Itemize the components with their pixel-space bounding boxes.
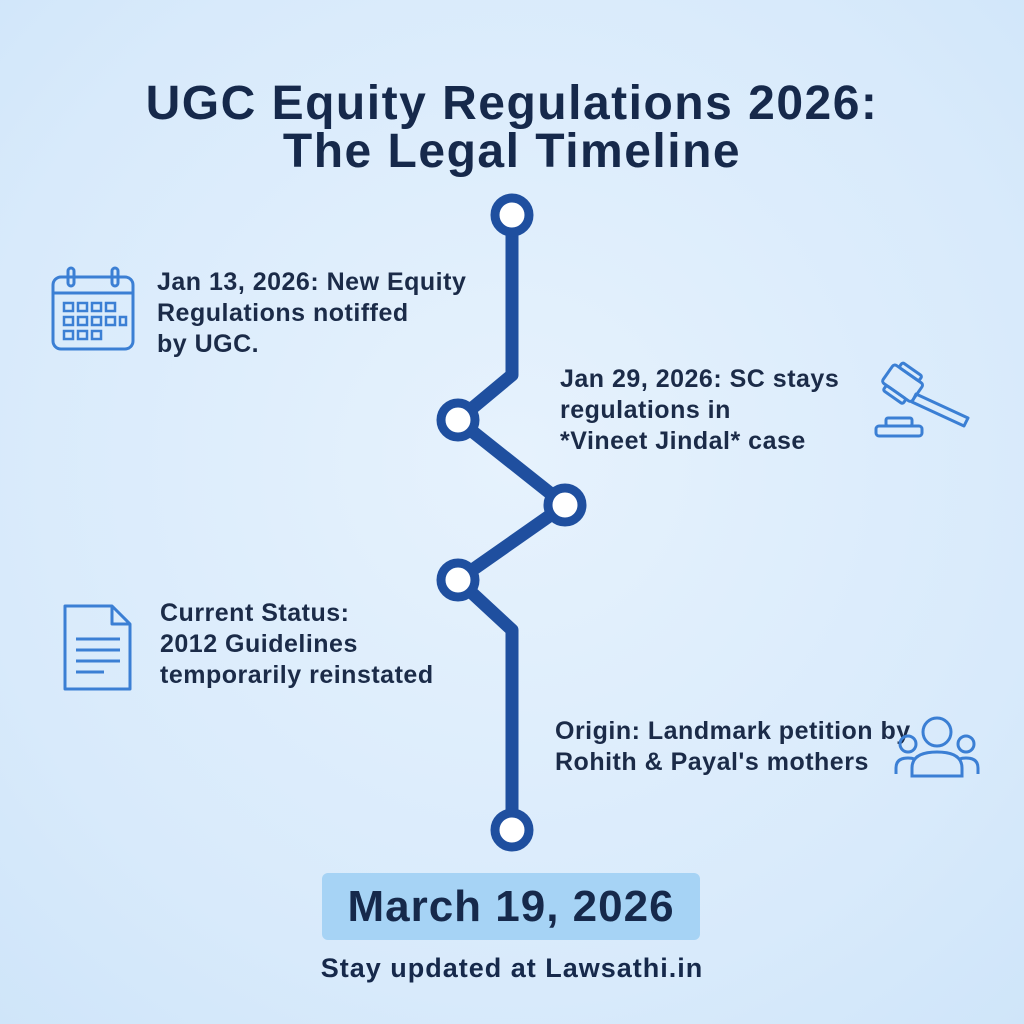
text: Jan 13: by UGC. bbox=[157, 330, 259, 358]
footer text: Stay updated at Lawsathi.in bbox=[321, 953, 703, 983]
date box bbox=[322, 873, 700, 940]
icon: calendar bbox=[52, 266, 134, 350]
title: UGC Equity Regulations 2026: bbox=[146, 77, 878, 130]
icon: gavel bbox=[874, 362, 970, 438]
text: Jan 13: Regulations notiffed bbox=[157, 299, 409, 327]
text: current status: temporarily reinstated bbox=[160, 661, 434, 689]
text: Jan 29: *Vineet Jindal* case bbox=[560, 427, 806, 455]
text: origin: Origin: Landmark petition by bbox=[555, 717, 911, 745]
text: Jan 29 bbox=[560, 365, 839, 455]
date box: March 19, 2026 bbox=[347, 882, 675, 931]
text: current status bbox=[160, 599, 434, 689]
text: Jan 29: regulations in bbox=[560, 396, 731, 424]
title: The Legal Timeline bbox=[283, 125, 741, 178]
text: Jan 13 bbox=[157, 268, 466, 358]
text: origin bbox=[555, 717, 911, 776]
text: origin: Rohith & Payal's mothers bbox=[555, 748, 869, 776]
icon: people bbox=[894, 716, 980, 778]
title bbox=[146, 77, 878, 178]
text: Jan 13: Jan 13, 2026: New Equity bbox=[157, 268, 466, 296]
icon: document bbox=[64, 604, 132, 690]
text: Jan 29: Jan 29, 2026: SC stays bbox=[560, 365, 839, 393]
text: current status: 2012 Guidelines bbox=[160, 630, 358, 658]
text: current status: Current Status: bbox=[160, 599, 349, 627]
